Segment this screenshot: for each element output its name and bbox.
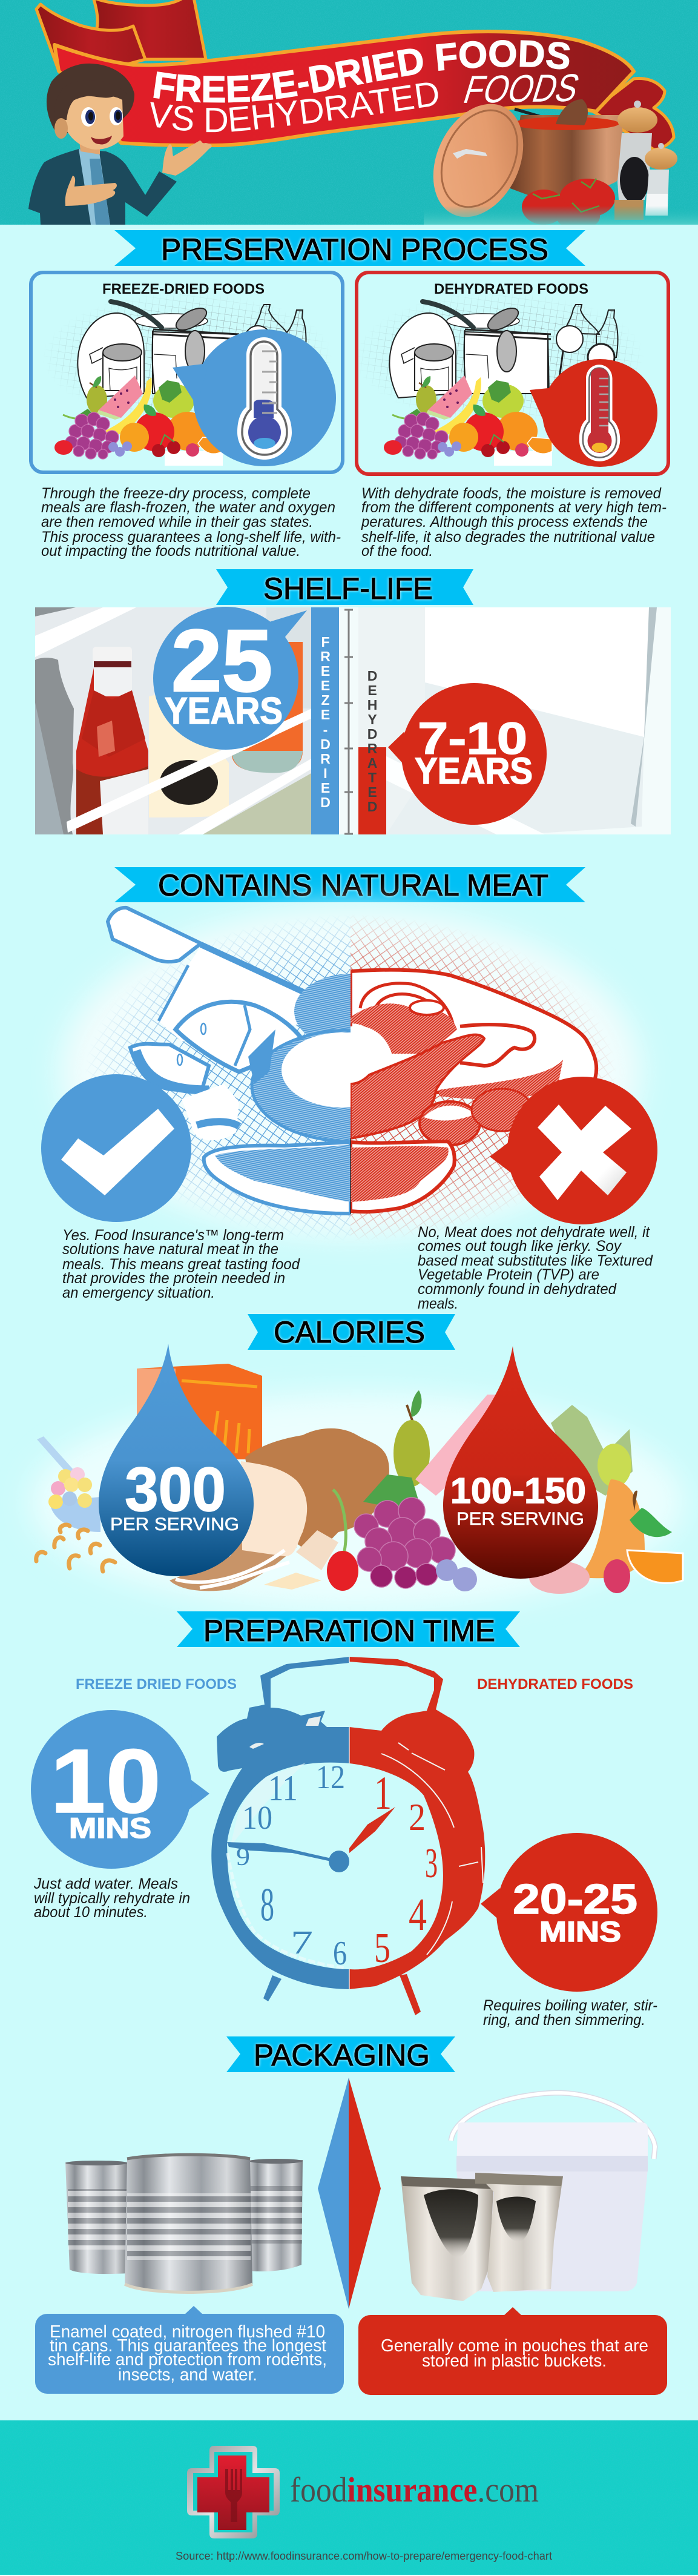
clock numerals red: 5 xyxy=(374,1925,390,1972)
clock numerals blue xyxy=(236,1759,347,1972)
fruit pile xyxy=(384,375,552,466)
clock numerals red xyxy=(374,1766,438,1972)
text block: freeze-dried process: out impacting the foods nutritional value. xyxy=(41,543,300,560)
plastic bucket with pouches xyxy=(401,2093,655,2301)
minute hand xyxy=(227,1842,331,1861)
text block: no natural meat: based meat substitutes like Textured xyxy=(418,1252,653,1269)
ladle xyxy=(556,99,588,125)
divider diamond xyxy=(318,2078,381,2309)
sketch of pantry goods xyxy=(42,292,333,423)
callout box: cans description: tin cans. This guarantees the longest xyxy=(50,2336,326,2356)
salt shaker xyxy=(646,170,669,209)
food pile illustration xyxy=(30,1364,684,1611)
text block: dehydrated process: of the food. xyxy=(361,543,433,560)
text block: yes natural meat: solutions have natural meat in the xyxy=(62,1241,278,1258)
text block: no natural meat: No, Meat does not dehydrate well, it xyxy=(418,1224,650,1241)
source line: Source: http://www.foodinsurance.com/how-to-prepare/emergency-food-chart xyxy=(176,2550,552,2562)
no badge with cross xyxy=(490,1077,657,1224)
calorie drop: dehydrated: 100-150 xyxy=(450,1471,586,1511)
pot body xyxy=(509,115,624,197)
callout: 25 years: 25 xyxy=(171,612,272,710)
text block: freeze-dried process: are then removed while in their gas states. xyxy=(41,514,313,530)
callout: 7-10 years: 7-10 xyxy=(418,713,527,764)
section banner: contains natural meat: CONTAINS NATURAL MEAT xyxy=(158,868,548,902)
text block: requires boiling water xyxy=(483,1997,657,2029)
calorie drop: dehydrated xyxy=(443,1346,598,1579)
panel: freeze-dried foods xyxy=(31,272,343,472)
text block: dehydrated process xyxy=(361,485,667,560)
section banner: shelf-life: SHELF-LIFE xyxy=(263,572,433,606)
calorie drop: freeze-dried: PER SERVING xyxy=(110,1514,239,1534)
clock numerals blue: 6 xyxy=(333,1935,347,1972)
text block: no natural meat: meals. xyxy=(418,1295,458,1312)
clock numerals blue: 8 xyxy=(260,1878,274,1930)
grapes xyxy=(354,1498,455,1588)
callout: 25 years: YEARS xyxy=(165,690,283,732)
tomatoes xyxy=(522,179,615,230)
alarm clock xyxy=(211,1657,485,2015)
ribbon back left tail xyxy=(93,0,206,59)
clock red half xyxy=(349,1657,485,1989)
grape leaf and stem xyxy=(333,1490,346,1556)
ribbon banner xyxy=(36,0,674,150)
lid xyxy=(433,104,523,217)
soup xyxy=(513,117,619,130)
label: dehydrated foods: DEHYDRATED FOODS xyxy=(477,1676,633,1693)
right hand xyxy=(162,140,212,176)
calorie drop: freeze-dried xyxy=(99,1344,254,1576)
fruit pile xyxy=(54,375,223,466)
panel heading: FREEZE-DRIED FOODS xyxy=(102,281,265,297)
red half: steak, drumstick, liver xyxy=(84,914,617,1241)
text block: just add water: Just add water. Meals xyxy=(33,1875,178,1892)
left can xyxy=(65,2161,128,2274)
strawberry xyxy=(327,1551,358,1591)
clock numerals blue: 11 xyxy=(268,1768,298,1808)
macaroni xyxy=(36,1525,115,1571)
right can xyxy=(249,2159,303,2271)
blue bubble with cold thermometer xyxy=(173,329,336,466)
ear xyxy=(54,118,68,139)
mouth xyxy=(91,136,112,144)
clock numerals blue: 9 xyxy=(236,1843,250,1871)
bar label: freeze-dried: FREEZE-DRIED xyxy=(320,634,331,810)
footer band xyxy=(0,2420,698,2576)
section banner: shelf-life xyxy=(216,569,473,606)
text block: dehydrated process: With dehydrate foods, the moisture is removed xyxy=(361,485,662,502)
callout: 10 mins xyxy=(31,1710,209,1869)
calorie drop: freeze-dried: 300 xyxy=(125,1455,226,1524)
callout: 20-25 mins xyxy=(481,1833,657,1992)
clock numerals red: 4 xyxy=(409,1889,427,1940)
text block: just add water: about 10 minutes. xyxy=(34,1904,148,1921)
watermelon xyxy=(415,1395,496,1496)
sketch of pantry goods xyxy=(354,292,645,423)
logo: cross and fork xyxy=(187,2446,280,2538)
section banner: calories xyxy=(248,1314,455,1350)
text block: yes natural meat: that provides the protein needed in xyxy=(62,1270,285,1287)
callout: 20-25 mins: MINS xyxy=(539,1915,621,1947)
cereal bowl xyxy=(37,1436,100,1532)
clock red highlights xyxy=(381,1743,483,1955)
fridge illustration xyxy=(35,607,671,834)
callout: 25 years xyxy=(153,607,307,750)
title: FREEZE-DRIED FOODS xyxy=(153,40,570,103)
head xyxy=(64,95,123,150)
text block: freeze-dried process: Through the freeze-dry process, complete xyxy=(41,485,311,502)
callout box: cans description: Enamel coated, nitrogen flushed #10 xyxy=(50,2322,325,2342)
text block: yes natural meat xyxy=(62,1227,300,1301)
pear xyxy=(407,1405,415,1429)
meat illustration xyxy=(60,908,641,1241)
text block: no natural meat: commonly found in dehydrated xyxy=(418,1281,617,1298)
callout box: cans description: shelf-life and protection from rodents, xyxy=(48,2350,327,2370)
calorie drop: dehydrated: PER SERVING xyxy=(456,1509,584,1529)
bucket handle xyxy=(451,2093,655,2159)
red bubble with hot thermometer xyxy=(530,359,657,467)
clock numerals red: 2 xyxy=(409,1795,426,1838)
panel: dehydrated foods xyxy=(354,272,668,474)
callout box: pouches description: Generally come in pouches that are xyxy=(381,2336,648,2356)
text block: dehydrated process: peratures. Although this process extends the xyxy=(361,514,648,530)
clock numerals red: 1 xyxy=(374,1766,392,1819)
text block: just add water xyxy=(33,1875,190,1921)
callout box: pouches description xyxy=(358,2307,667,2395)
ribbon right tail xyxy=(592,79,674,150)
bucket lid and body xyxy=(456,2169,648,2291)
clock numerals red: 3 xyxy=(425,1840,438,1887)
pot and tomatoes xyxy=(424,99,698,225)
neck xyxy=(79,136,100,154)
tomato stems xyxy=(533,179,599,212)
crackers xyxy=(264,1573,321,1590)
peach and mango xyxy=(581,1479,645,1578)
text block: just add water: will typically rehydrate in xyxy=(34,1890,190,1907)
section banner: calories: CALORIES xyxy=(274,1315,425,1349)
door shelf rails xyxy=(67,708,312,833)
clock numerals blue: 7 xyxy=(291,1924,313,1961)
lid handle xyxy=(453,149,487,159)
left hand xyxy=(65,176,117,206)
text block: dehydrated process: from the different components at very high tem- xyxy=(361,499,667,516)
clock blue highlights xyxy=(230,1763,306,1847)
lettuce and lime xyxy=(551,1405,633,1496)
text block: no natural meat xyxy=(418,1224,653,1312)
callout box: cans description: insects, and water. xyxy=(118,2365,257,2385)
raspberry xyxy=(604,1559,630,1593)
callout: 20-25 mins: 20-25 xyxy=(513,1875,637,1923)
callout box: pouches description: stored in plastic buckets. xyxy=(422,2351,607,2371)
hair fringe xyxy=(54,80,127,132)
hub xyxy=(329,1851,349,1872)
left pouch xyxy=(401,2176,494,2301)
clock numerals blue: 12 xyxy=(316,1759,345,1795)
cartoon businessman xyxy=(28,64,212,225)
ribbon main band xyxy=(54,31,634,145)
yes badge with check mark xyxy=(41,1074,191,1222)
ladle handle xyxy=(514,108,541,115)
callout: 7-10 years xyxy=(388,683,547,825)
clock divider xyxy=(349,1657,350,1989)
ribbon front left tail xyxy=(36,4,145,79)
hair back xyxy=(47,64,134,133)
text block: yes natural meat: an emergency situation. xyxy=(62,1284,215,1301)
callout box: cans description xyxy=(35,2306,344,2394)
text block: yes natural meat: meals. This means great tasting food xyxy=(62,1256,300,1273)
hour hand xyxy=(349,1807,395,1853)
cream bottle xyxy=(149,690,229,817)
text block: no natural meat: Vegetable Protein (TVP) are xyxy=(418,1266,599,1283)
eyes xyxy=(81,107,123,127)
text block: dehydrated process: shelf-life, it also degrades the nutritional value xyxy=(361,529,655,546)
callout: 10 mins: 10 xyxy=(50,1730,161,1832)
orange slice xyxy=(627,1550,683,1583)
orange bottle xyxy=(231,642,303,772)
label: freeze dried foods: FREEZE DRIED FOODS xyxy=(76,1676,237,1693)
tin cans xyxy=(65,2155,303,2293)
blueberries xyxy=(436,1559,477,1591)
text block: requires boiling water: Requires boiling water, stir- xyxy=(483,1997,657,2014)
shelf-life bars xyxy=(311,607,386,834)
section banner: preservation process: PRESERVATION PROCESS xyxy=(161,233,548,266)
clock numerals blue: 10 xyxy=(242,1799,272,1836)
logo wordmark: foodinsurance.com xyxy=(290,2470,539,2509)
text block: yes natural meat: Yes. Food Insurance's™ long-term xyxy=(62,1227,284,1244)
section banner: preparation time: PREPARATION TIME xyxy=(203,1614,495,1648)
ketchup bottle xyxy=(76,668,148,777)
text block: freeze-dried process xyxy=(41,485,341,560)
text block: freeze-dried process: meals are flash-frozen, the water and oxygen xyxy=(41,499,335,516)
pepper grinder xyxy=(617,133,652,200)
right pouch xyxy=(475,2173,563,2292)
title: VS DEHYDRATED xyxy=(150,82,438,132)
panel heading: DEHYDRATED FOODS xyxy=(434,281,588,297)
shirt and tie xyxy=(79,149,110,225)
header band xyxy=(0,0,698,225)
cereal box xyxy=(137,1364,262,1459)
text block: requires boiling water: ring, and then simmering. xyxy=(483,2012,645,2029)
title: FOODS xyxy=(459,66,585,111)
callout: 7-10 years: YEARS xyxy=(415,750,533,791)
suit xyxy=(28,149,177,225)
bread loaf xyxy=(245,1428,389,1556)
callout: 10 mins: MINS xyxy=(69,1812,151,1844)
clock blue half xyxy=(211,1657,349,1989)
clock feet xyxy=(263,1975,282,2001)
text block: no natural meat: comes out tough like jerky. Soy xyxy=(418,1238,622,1255)
bar label: dehydrated: DEHYDRATED xyxy=(367,668,378,814)
title xyxy=(150,40,585,132)
section banner: packaging: PACKAGING xyxy=(254,2038,430,2072)
blue half: fish, cleaver, poultry xyxy=(84,908,617,1241)
front can xyxy=(125,2155,252,2293)
text block: freeze-dried process: This process guarantees a long-shelf life, with- xyxy=(41,529,341,546)
